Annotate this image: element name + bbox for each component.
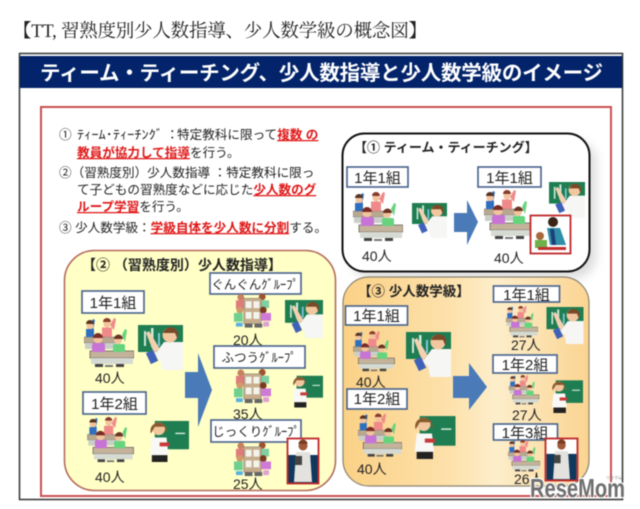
description text: ： [166, 128, 179, 142]
panel: team teaching: 40人 [494, 250, 524, 266]
description text: 特定教科に限って複数 の [177, 127, 318, 142]
description text: ②（習熟度別）少人数指導 ：特定教科に限っ [59, 165, 314, 180]
panel: small class size: 27人 [511, 337, 541, 353]
panel: proficiency-based small groups: 1年1組 [90, 295, 136, 312]
panel: proficiency-based small groups: 20人 [233, 332, 263, 348]
description text: 教員が協力して指導を行う。 [77, 145, 240, 160]
description text: ③ 少人数学級：学級自体を少人数に分割する。 [59, 220, 327, 235]
description text [59, 127, 327, 235]
panel: small class size: 40人 [356, 374, 386, 390]
red border panel [41, 107, 611, 496]
description text: ループ学習を行う。 [77, 199, 189, 214]
panel: small class size: 1年1組 [503, 287, 550, 304]
panel: small class size: 27人 [512, 407, 542, 423]
panel: small class size: 1年1組 [353, 308, 400, 325]
panel: proficiency-based small groups: 40人 [95, 469, 125, 485]
panel: proficiency-based small groups: 1年2組 [91, 396, 138, 413]
panel: proficiency-based small groups: ぐんぐんｸﾞﾙｰﾌﾟ [211, 278, 299, 292]
panel: small class size: 26人 [514, 471, 544, 487]
description text: ① [59, 128, 72, 142]
panel: small class size: 40人 [357, 461, 387, 477]
panel: team teaching: 【① ティーム・ティーチング】 [354, 140, 538, 155]
panel: proficiency-based small groups: 40人 [95, 370, 125, 386]
panel: small class size [343, 277, 589, 487]
panel: team teaching: 1年1組 [486, 170, 533, 187]
panel: proficiency-based small groups: 35人 [233, 406, 263, 422]
header banner [20, 56, 622, 88]
logo: ReseMom watermark: リセマム [606, 475, 622, 480]
panel: small class size: 1年2組 [502, 357, 548, 374]
panel: team teaching [342, 134, 596, 278]
panel: small class size: 1年3組 [502, 425, 548, 442]
panel: small class size: 1年2組 [354, 391, 400, 408]
header banner: ティーム・ティーチング、少人数指導と少人数学級のイメージ [40, 61, 603, 85]
description text: ﾃｨｰﾑ･ﾃｨｰﾁﾝｸﾞ [77, 128, 163, 142]
panel: team teaching: 1年1組 [354, 170, 401, 187]
panel: proficiency-based small groups: じっくりｸﾞﾙｰﾌﾟ [212, 425, 300, 439]
panel: proficiency-based small groups: 25人 [233, 476, 263, 492]
panel: team teaching: 40人 [362, 248, 392, 264]
description text: て子どもの習熟度などに応じた少人数のグ [77, 182, 317, 197]
panel: proficiency-based small groups: 【② （習熟度別）少人数指導】 [82, 257, 282, 273]
title: 【TT, 習熟度別少人数指導、少人数学級の概念図】 [13, 21, 427, 42]
panel: proficiency-based small groups [64, 250, 336, 492]
panel: proficiency-based small groups: ふつうｸﾞﾙｰﾌﾟ [221, 351, 297, 365]
panel: small class size: 【③ 少人数学級】 [358, 283, 470, 299]
